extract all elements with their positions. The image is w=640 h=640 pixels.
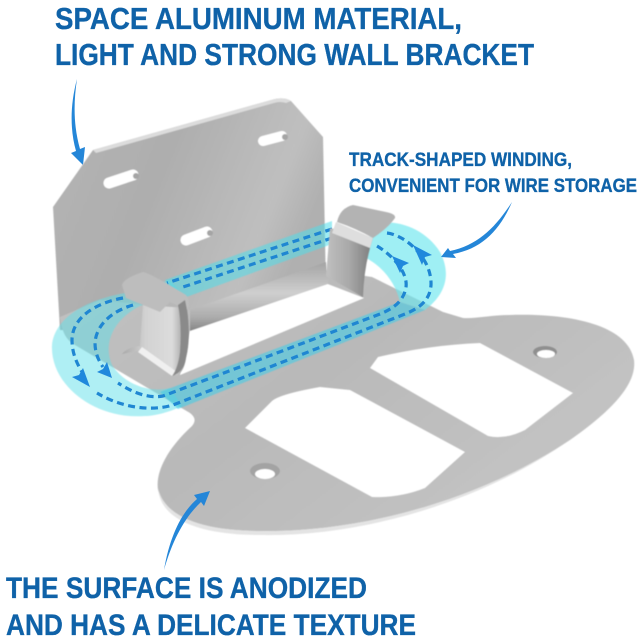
callout: track winding: TRACK-SHAPED WINDING, [349,149,572,171]
bend highlight [190,262,328,331]
oval lower edge [158,440,570,535]
mounting hole left [250,463,280,479]
arrow: to wall plate [71,79,85,165]
bracket: metal body [53,98,634,535]
mounting hole right [533,346,557,358]
left hook [122,272,189,376]
cyan track band [52,221,446,416]
band: right curve [366,222,446,310]
dashed track lines [72,229,431,408]
right hook [326,205,395,297]
callout: anodized surface: THE SURFACE IS ANODIZED [6,572,367,605]
arrow: to track [441,202,512,258]
band: upper straight [165,221,332,300]
band: lower straight [160,302,425,409]
callout: anodized surface [6,572,416,640]
arrow: to surface [164,491,210,570]
band: left curve [52,280,182,416]
center opening [180,283,364,375]
slot right [263,134,288,141]
outer dashed line [97,233,431,408]
slot middle [186,230,213,240]
inner dashed line [118,246,406,397]
plate top edge highlight [93,98,291,153]
title: aluminum material: LIGHT AND STRONG WALL BRACKET [55,37,534,72]
slot left [109,173,139,183]
back plate [53,98,326,335]
base plate with windows [60,270,634,531]
callout: track winding [349,149,637,197]
track arrowheads [72,245,432,387]
title: aluminum material [55,1,534,72]
title: aluminum material: SPACE ALUMINUM MATERIAL, [55,1,462,36]
